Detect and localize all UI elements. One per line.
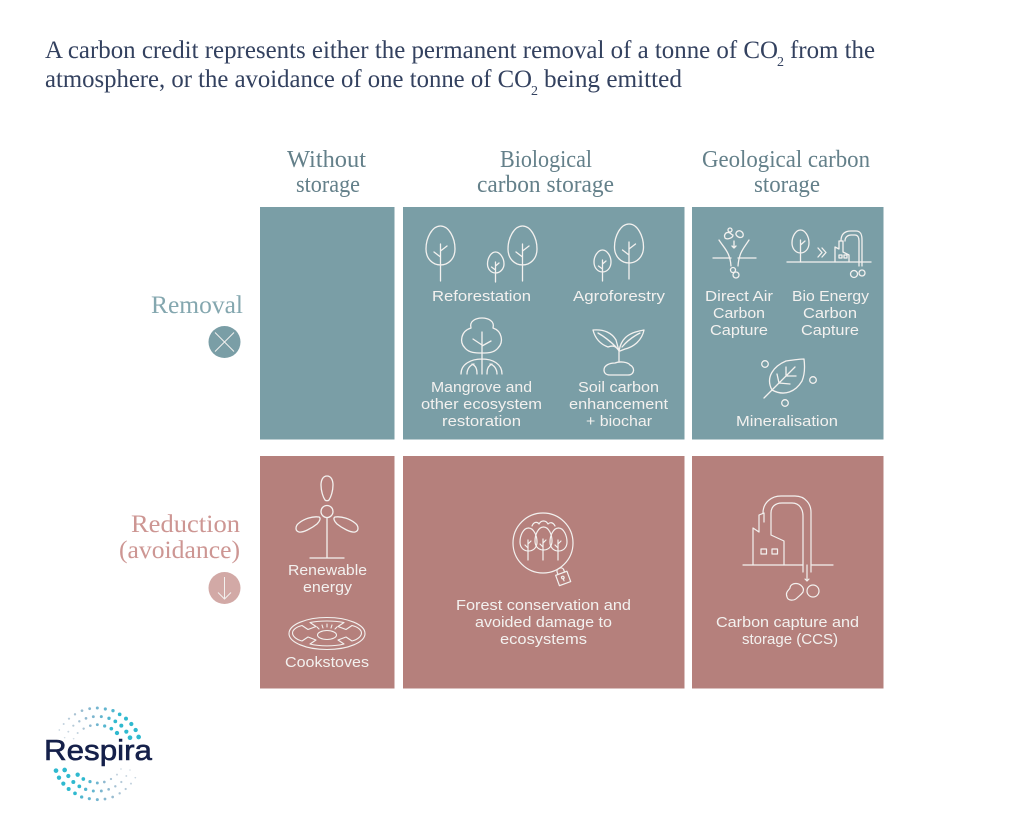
- icon: seedling: [593, 330, 644, 375]
- icon: mangrove: [461, 318, 502, 374]
- label: bio energy carbon capture: [792, 288, 870, 339]
- icon: reforestation trees: [426, 226, 537, 282]
- label: reforestation: Reforestation: [432, 288, 531, 305]
- icon: direct air capture: [713, 228, 756, 278]
- label: mangrove: [421, 379, 542, 430]
- label: soil carbon: + biochar: [586, 413, 652, 430]
- row label: reduction: [119, 509, 240, 604]
- label: bio energy carbon capture: Carbon: [803, 305, 857, 322]
- label: agroforestry: Agroforestry: [573, 288, 666, 305]
- title: [45, 37, 875, 99]
- panel: reduction biological storage: [403, 456, 684, 688]
- label: forest conservation: [456, 597, 631, 648]
- label: carbon capture and storage: Carbon capture and: [716, 614, 859, 631]
- label: direct air carbon capture: Direct Air: [705, 288, 773, 305]
- column heading: geological carbon storage: storage: [754, 172, 820, 198]
- title: atmosphere, or the avoidance of one tonne of CO: [45, 66, 532, 93]
- column heading: biological carbon storage: carbon storage: [477, 172, 614, 198]
- label: direct air carbon capture: [705, 288, 773, 339]
- row label: removal: [151, 290, 243, 358]
- title: A carbon credit represents either the permanent removal of a tonne of CO: [45, 37, 778, 64]
- label: mangrove: other ecosystem: [421, 396, 542, 413]
- label: soil carbon: [569, 379, 669, 430]
- label: mangrove: Mangrove and: [431, 379, 532, 396]
- label: forest conservation: avoided damage to: [475, 614, 612, 631]
- column heading: biological carbon storage: Biological: [500, 147, 592, 173]
- column heading: without storage: Without: [287, 147, 366, 173]
- label: renewable energy: [288, 562, 367, 596]
- label: soil carbon: Soil carbon: [578, 379, 659, 396]
- panel: removal without storage: [260, 207, 394, 440]
- icon: bio energy carbon capture: [787, 230, 871, 278]
- label: direct air carbon capture: Capture: [710, 322, 768, 339]
- label: bio energy carbon capture: Capture: [801, 322, 859, 339]
- label: mangrove: restoration: [442, 413, 521, 430]
- panel: removal biological storage: [403, 207, 684, 440]
- label: renewable energy: Renewable: [288, 562, 367, 579]
- logo: Respira: [44, 706, 153, 801]
- row label: reduction: (avoidance): [119, 535, 240, 564]
- title: 2: [777, 55, 784, 70]
- label: cookstoves: Cookstoves: [285, 654, 369, 671]
- icon: mineralisation leaf: [762, 359, 816, 406]
- title: from the: [790, 37, 875, 64]
- label: carbon capture and storage: storage (CCS): [742, 631, 838, 648]
- title: 2: [531, 84, 538, 99]
- icon: forest with padlock: [513, 513, 573, 586]
- label: direct air carbon capture: Carbon: [713, 305, 765, 322]
- column heading: geological carbon storage: Geological carbon: [702, 147, 870, 173]
- icon: carbon capture and storage: [743, 496, 833, 600]
- panel: removal geological storage: [692, 207, 884, 440]
- label: forest conservation: Forest conservation and: [456, 597, 631, 614]
- label: bio energy carbon capture: Bio Energy: [792, 288, 870, 305]
- logo: Respira: Respira: [44, 735, 153, 767]
- row label: removal: Removal: [151, 290, 243, 319]
- column heading: biological carbon storage: [477, 147, 614, 198]
- label: mineralisation: Mineralisation: [736, 413, 838, 430]
- label: soil carbon: enhancement: [569, 396, 669, 413]
- column heading: geological carbon storage: [702, 147, 870, 198]
- panel: reduction geological storage: [692, 456, 884, 688]
- row label: reduction: Reduction: [131, 509, 240, 538]
- label: forest conservation: ecosystems: [500, 631, 587, 648]
- icon: wind turbine: [296, 476, 358, 558]
- label: carbon capture and storage: [716, 614, 859, 648]
- column heading: without storage: [287, 147, 366, 198]
- icon: agroforestry trees: [594, 224, 644, 281]
- column heading: without storage: storage: [296, 172, 360, 198]
- icon: cookstove: [289, 618, 365, 650]
- label: renewable energy: energy: [303, 579, 353, 596]
- panel: reduction without storage: [260, 456, 394, 688]
- title: being emitted: [544, 66, 682, 93]
